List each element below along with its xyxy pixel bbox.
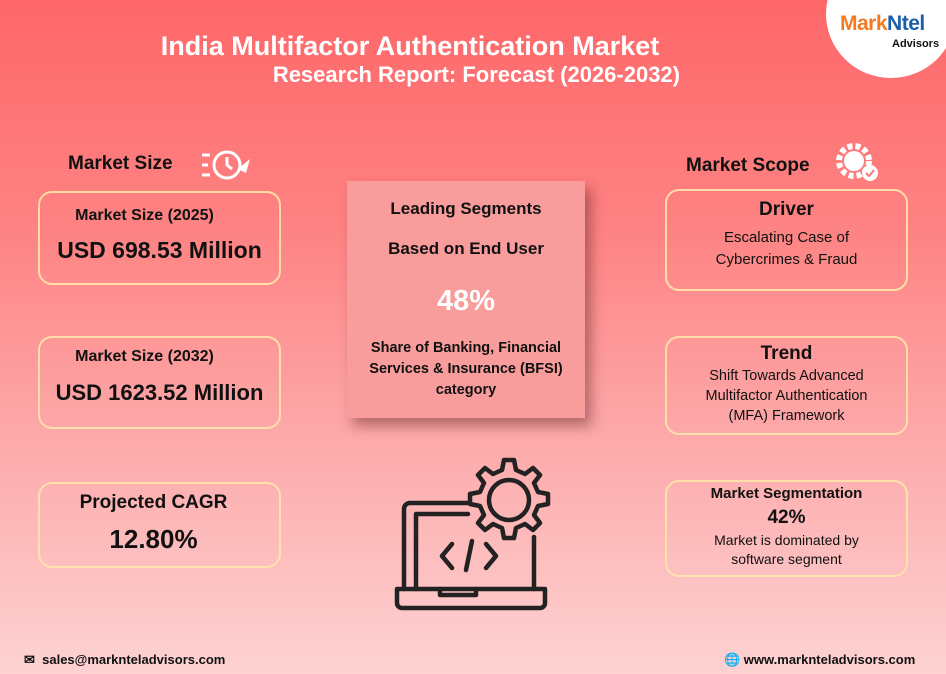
box: market size 2025 [38, 191, 281, 285]
panel: leading segments: Based on End User [388, 239, 544, 258]
icon: laptop with gear [394, 458, 550, 610]
title [161, 31, 680, 87]
panel: leading segments: Share of Banking, Financial [371, 340, 561, 356]
box: market segmentation: 42% [767, 507, 806, 528]
logo: Advisors [892, 38, 939, 50]
heading: market scope: Market Scope [686, 155, 810, 176]
box: driver: Escalating Case of [724, 229, 849, 246]
panel: leading segments: Leading Segments [390, 199, 542, 218]
box: CAGR: Projected CAGR [80, 492, 227, 513]
box: market segmentation: Market is dominated by [714, 532, 859, 548]
box: trend: (MFA) Framework [728, 408, 844, 424]
box: market size 2032: USD 1623.52 Million [56, 380, 263, 405]
panel: leading segments: 48% [437, 285, 495, 317]
panel: leading segments: Services & Insurance (BFSI) [369, 361, 563, 377]
box: trend: Multifactor Authentication [705, 388, 868, 404]
box: CAGR: 12.80% [109, 524, 198, 554]
box: market size 2032: Market Size (2032) [75, 348, 214, 365]
box: market segmentation: software segment [731, 551, 842, 567]
panel: leading segments: category [436, 382, 496, 398]
box: CAGR [38, 482, 281, 568]
box: market segmentation: Market Segmentation [711, 485, 862, 502]
box: market size 2025: Market Size (2025) [75, 207, 214, 224]
footer: email: ✉ sales@marknteladvisors.com [24, 652, 225, 667]
box: market size 2025: USD 698.53 Million [57, 237, 262, 263]
logo: MarkNtel [840, 12, 925, 35]
box: trend: Trend [761, 343, 812, 364]
logo [826, 0, 946, 78]
box: driver: Driver [759, 199, 814, 220]
footer: website: 🌐 www.marknteladvisors.com [724, 652, 915, 667]
box: trend: Shift Towards Advanced [709, 368, 864, 384]
heading: market size: Market Size [68, 153, 173, 174]
box: driver [665, 189, 908, 291]
title: India Multifactor Authentication Market [161, 31, 659, 61]
box: driver: Cybercrimes & Fraud [716, 251, 857, 268]
box: market segmentation [665, 480, 908, 577]
title: Research Report: Forecast (2026-2032) [273, 62, 680, 87]
box: trend [665, 336, 908, 435]
icon: gear check [836, 143, 878, 181]
icon: speed rocket [202, 150, 250, 180]
box: market size 2032 [38, 336, 281, 429]
panel: leading segments [347, 181, 585, 418]
